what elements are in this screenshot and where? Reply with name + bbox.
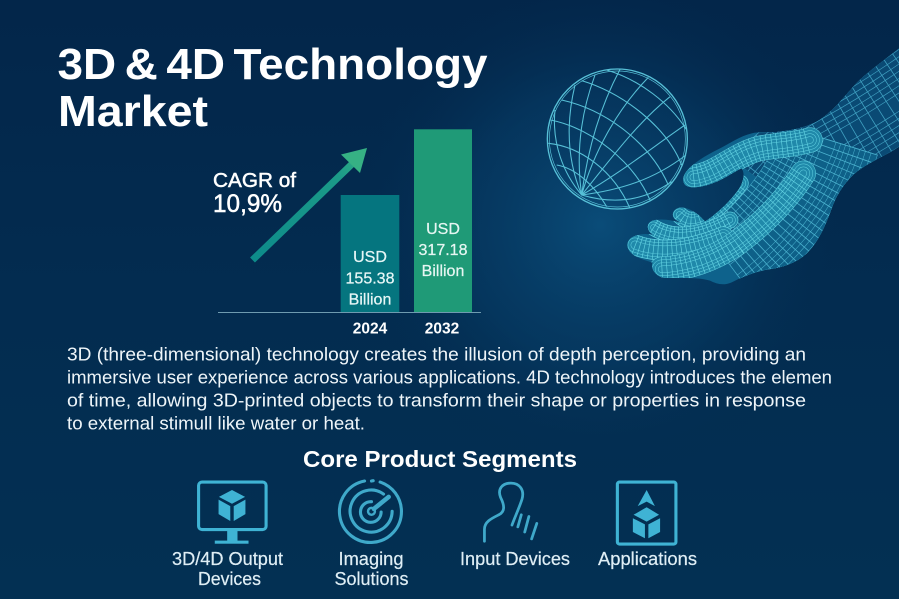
value label: 2024: 155.38: [346, 270, 395, 288]
label: Imaging: [338, 549, 404, 569]
label: Devices: [198, 569, 261, 589]
forearm mesh: [773, 83, 899, 190]
chart axis: [218, 312, 481, 314]
value label: 2024: USD: [353, 249, 387, 266]
illustration: wireframe sphere and hand: [547, 48, 899, 284]
description paragraph: of time, allowing 3D-printed objects to transform their shape or properties in response: [67, 390, 806, 410]
label: Solutions: [334, 569, 408, 589]
bar: 2032: [414, 129, 472, 312]
icon: monitor with cube: [199, 482, 266, 544]
year axis labels: 2024: [353, 320, 388, 338]
description paragraph: 3D (three-dimensional) technology creates the illusion of depth perception, providing an: [67, 344, 806, 364]
market growth chart: [213, 129, 481, 338]
label: Applications: [598, 549, 697, 569]
year axis labels: [353, 320, 459, 338]
icon: touch gesture hand: [484, 483, 537, 541]
label: [334, 549, 408, 589]
finger: ring: [653, 220, 730, 235]
icon: radar rings: [339, 481, 401, 542]
section heading: Core Product Segments: [303, 446, 577, 472]
segment: Imaging Solutions: [334, 481, 408, 589]
icon: app square with cube: [617, 482, 676, 544]
finger: pinky: [635, 237, 723, 250]
segment: Applications: [598, 482, 697, 569]
title: 3D & 4D Technology: [58, 41, 487, 89]
finger: middle: [679, 183, 740, 220]
description paragraph: to external stimull like water or heat.: [67, 412, 365, 434]
bar: 2024: [341, 195, 399, 312]
finger: thumb: [662, 173, 803, 269]
wireframe hand: [627, 48, 899, 284]
label: [172, 549, 283, 589]
CAGR label: 10,9%: [213, 190, 282, 218]
description paragraph: immersive user experience across various applications. 4D technology introduces the elemen: [67, 366, 832, 388]
wireframe sphere: [547, 69, 687, 209]
label: 3D/4D Output: [172, 549, 283, 569]
value label: 2032: 317.18: [419, 242, 468, 259]
CAGR label: CAGR of: [213, 169, 296, 192]
segment: Input Devices: [460, 483, 570, 569]
segment: 3D/4D Output Devices: [172, 482, 283, 589]
value label: 2032: Billion: [422, 263, 464, 280]
value label: 2024: Billion: [349, 292, 391, 308]
year axis labels: 2032: [425, 320, 459, 338]
description paragraph: [67, 344, 832, 434]
title second line: Market: [58, 88, 208, 136]
value label: 2024: [346, 249, 395, 308]
growth arrow: [252, 148, 367, 260]
CAGR label: [213, 169, 296, 218]
value label: 2032: [419, 221, 468, 280]
value label: 2032: USD: [426, 221, 460, 238]
label: Input Devices: [460, 549, 570, 569]
finger: index: [693, 140, 810, 177]
palm mesh: [733, 140, 830, 270]
